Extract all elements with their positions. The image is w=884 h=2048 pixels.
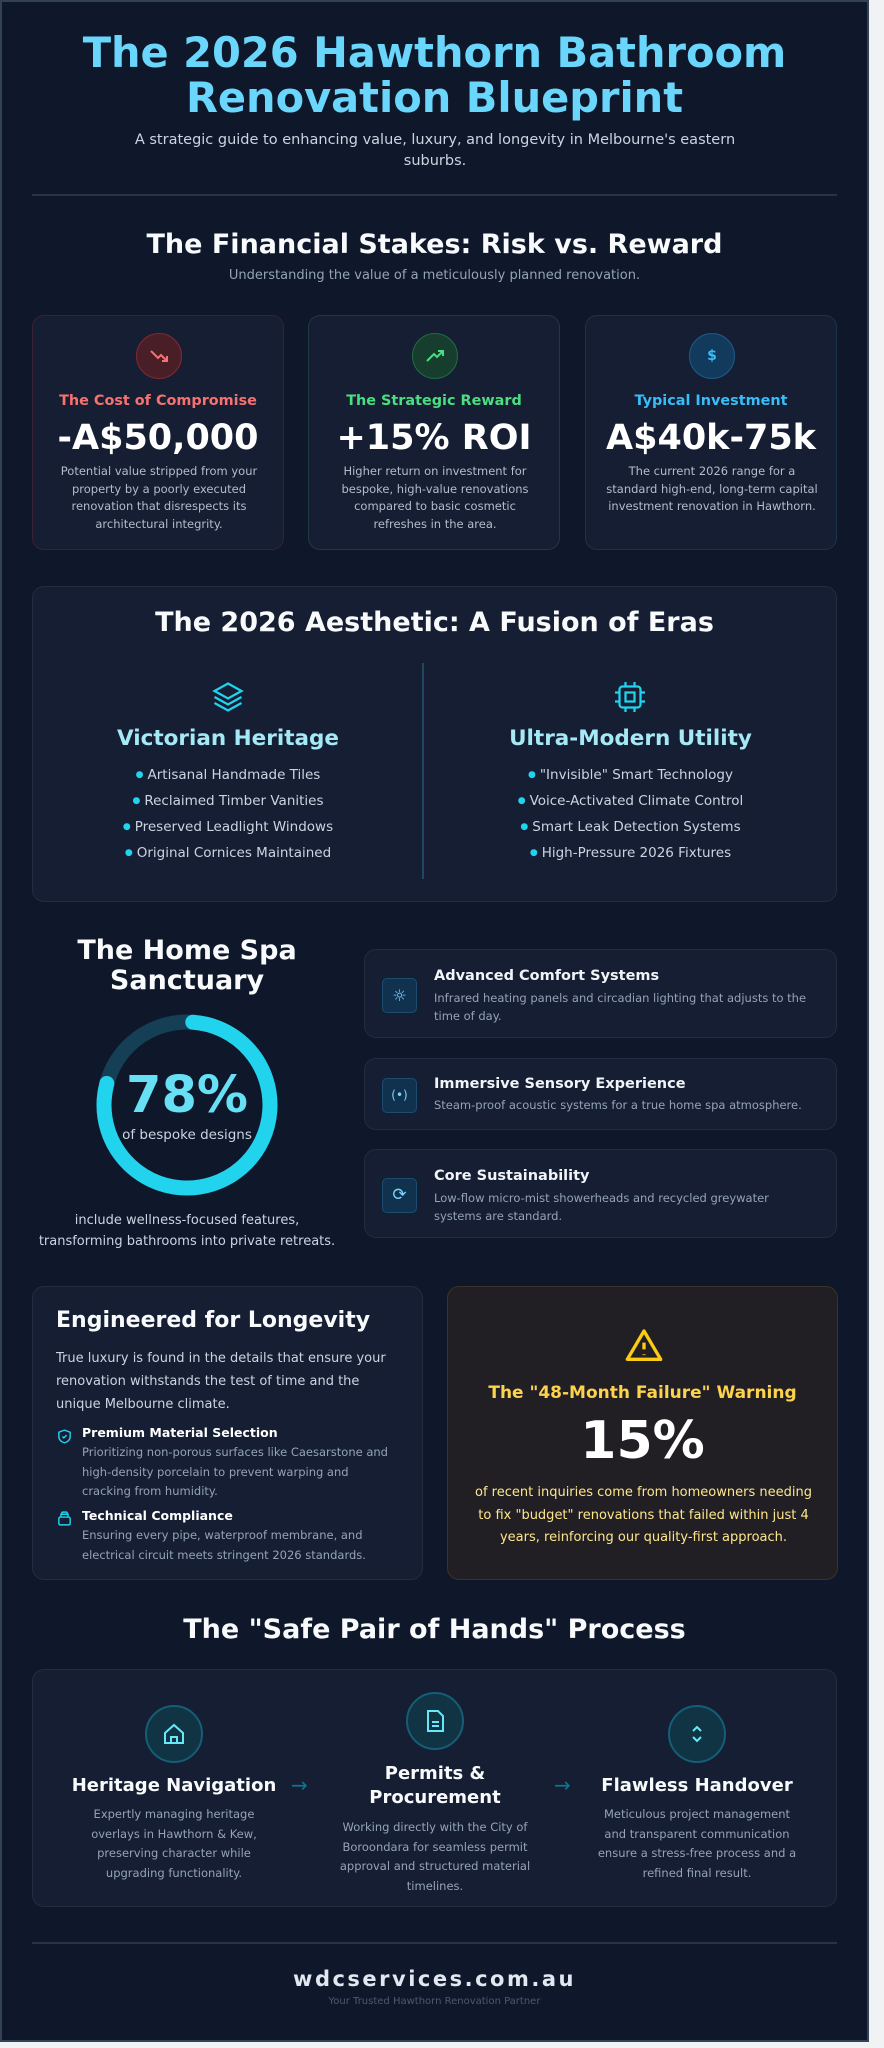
column: victorian bbox=[117, 682, 339, 861]
card: advanced comfort: Advanced Comfort Systems bbox=[434, 968, 659, 984]
card: advanced comfort bbox=[364, 949, 837, 1038]
caption: spa: include wellness-focused features, transforming bathrooms into private retreats. bbox=[39, 1213, 335, 1249]
heading: home spa: Sanctuary bbox=[110, 965, 264, 996]
icon: sun bbox=[382, 978, 417, 1013]
column: victorian: Victorian Heritage bbox=[117, 726, 339, 751]
card: immersive sensory bbox=[364, 1058, 837, 1130]
card: typical investment: A$40k-75k bbox=[606, 418, 816, 458]
panel: longevity: True luxury is found in the details that ensure your renovation withstands the test of time and the unique Melbourne climate. bbox=[56, 1351, 386, 1412]
panel: warning bbox=[447, 1286, 838, 1580]
card: strategic reward bbox=[308, 315, 560, 550]
step: permits: Procurement bbox=[369, 1787, 501, 1808]
icon: dollar: $ bbox=[707, 348, 717, 364]
step: handover: Meticulous project management and transparent communication ensure a stress-free process and a refined final result. bbox=[598, 1807, 796, 1880]
heading: home spa: The Home Spa bbox=[77, 935, 297, 966]
arrow: → bbox=[291, 1773, 308, 1797]
step: permits bbox=[340, 1692, 530, 1892]
column: victorian: ● Reclaimed Timber Vanities bbox=[132, 793, 324, 809]
icon: refresh bbox=[382, 1178, 417, 1213]
step: heritage navigation: Expertly managing heritage overlays in Hawthorn & Kew, preserving character while upgrading functionality. bbox=[91, 1807, 257, 1880]
heading: home spa bbox=[77, 935, 297, 996]
item: technical compliance: Ensuring every pipe, waterproof membrane, and electrical circuit meets stringent 2026 standards. bbox=[82, 1528, 366, 1562]
title bbox=[82, 28, 786, 122]
card: cost of compromise: Potential value stripped from your property by a poorly executed renovation that disrespects its architectural integrity. bbox=[61, 464, 257, 530]
card: immersive sensory: Steam-proof acoustic systems for a true home spa atmosphere. bbox=[434, 1098, 802, 1112]
panel: aesthetic bbox=[32, 586, 837, 902]
icon: warning bbox=[626, 1329, 662, 1361]
card: typical investment: The current 2026 range for a bbox=[629, 464, 795, 478]
panel: warning: 15% bbox=[580, 1411, 705, 1471]
card: strategic reward: +15% ROI bbox=[336, 418, 532, 458]
chart: 78% ring bbox=[96, 1014, 278, 1196]
card: sustainability: Core Sustainability bbox=[434, 1168, 590, 1184]
icon: trend up bbox=[412, 333, 458, 379]
card: typical investment: standard high-end, long-term capital investment renovation in Hawthorn. bbox=[606, 482, 818, 513]
card: cost of compromise bbox=[32, 315, 284, 550]
icon: chip bbox=[615, 682, 645, 712]
step: permits: Permits & bbox=[385, 1763, 485, 1784]
title: The 2026 Hawthorn Bathroom bbox=[83, 28, 786, 77]
card: advanced comfort: Infrared heating panels and circadian lighting that adjusts to the time of day. bbox=[434, 991, 806, 1023]
arrow: → bbox=[554, 1773, 571, 1797]
icon: broadcast bbox=[382, 1078, 417, 1113]
item: technical compliance bbox=[58, 1508, 366, 1562]
item: premium material: Prioritizing non-porous surfaces like Caesarstone and high-density porcelain to prevent warping and cracking from humidity. bbox=[82, 1445, 388, 1498]
column: victorian: ● Original Cornices Maintained bbox=[125, 845, 331, 861]
card: cost of compromise: -A$50,000 bbox=[57, 418, 259, 458]
icon: broadcast: (•) bbox=[391, 1088, 408, 1102]
icon: dollar bbox=[689, 333, 735, 379]
footer: tagline: Your Trusted Hawthorn Renovation Partner bbox=[329, 1996, 540, 2007]
step: permits: Working directly with the City of Boroondara for seamless permit approval and structured material timelines. bbox=[340, 1820, 530, 1892]
column: ultra-modern: ● "Invisible" Smart Technology bbox=[528, 767, 733, 783]
subtitle: A strategic guide to enhancing value, luxury, and longevity in Melbourne's eastern suburbs. bbox=[135, 132, 735, 169]
heading: process: The "Safe Pair of Hands" Process bbox=[183, 1614, 686, 1645]
icon: layers bbox=[212, 682, 244, 712]
column: ultra-modern: ● Voice-Activated Climate Control bbox=[518, 793, 743, 809]
icon: trend down bbox=[136, 333, 182, 379]
card: strategic reward: Higher return on investment for bespoke, high-value renovations compared to basic cosmetic refreshes in the area. bbox=[341, 464, 529, 530]
column: ultra-modern bbox=[509, 682, 752, 861]
card: typical investment: Typical Investment bbox=[634, 393, 787, 409]
column: victorian: ● Preserved Leadlight Windows bbox=[123, 819, 333, 835]
panel: longevity bbox=[32, 1286, 423, 1580]
card: cost of compromise: The Cost of Compromise bbox=[59, 393, 257, 409]
chart: 78% ring: 78% bbox=[126, 1066, 248, 1125]
icon: chevrons bbox=[668, 1705, 726, 1763]
title: Renovation Blueprint bbox=[186, 73, 683, 122]
column: ultra-modern: Ultra-Modern Utility bbox=[509, 726, 752, 751]
step: heritage navigation bbox=[72, 1705, 276, 1880]
card: strategic reward: The Strategic Reward bbox=[346, 393, 522, 409]
card: sustainability: Low-flow micro-mist showerheads and recycled greywater systems are standard. bbox=[434, 1191, 769, 1223]
icon: sun: ☼ bbox=[392, 986, 407, 1005]
step: handover: Flawless Handover bbox=[601, 1775, 793, 1796]
item: premium material: Premium Material Selection bbox=[82, 1425, 278, 1440]
step: heritage navigation: Heritage Navigation bbox=[72, 1775, 276, 1796]
heading: aesthetic: The 2026 Aesthetic: A Fusion of Eras bbox=[155, 607, 714, 638]
item: premium material bbox=[58, 1425, 388, 1498]
column: ultra-modern: ● Smart Leak Detection Systems bbox=[520, 819, 741, 835]
icon: house bbox=[145, 1705, 203, 1763]
step: handover bbox=[598, 1705, 796, 1880]
footer: brand: wdcservices.com.au bbox=[293, 1967, 576, 1991]
card: sustainability bbox=[364, 1149, 837, 1238]
column: ultra-modern: ● High-Pressure 2026 Fixtures bbox=[530, 845, 731, 861]
panel: warning: of recent inquiries come from homeowners needing to fix "budget" renovations that failed within just 4 years, reinforcing our quality-first approach. bbox=[475, 1485, 812, 1545]
panel: warning: The "48-Month Failure" Warning bbox=[488, 1383, 797, 1403]
icon: document bbox=[406, 1692, 464, 1750]
icon: refresh: ⟳ bbox=[392, 1185, 407, 1205]
item: technical compliance: Technical Compliance bbox=[82, 1508, 233, 1523]
heading: financial stakes: The Financial Stakes: Risk vs. Reward bbox=[147, 229, 722, 260]
chart: 78% ring: of bespoke designs bbox=[122, 1127, 252, 1143]
card: typical investment bbox=[585, 315, 837, 550]
panel: process bbox=[32, 1669, 837, 1907]
card: immersive sensory: Immersive Sensory Experience bbox=[434, 1076, 686, 1092]
heading: longevity: Engineered for Longevity bbox=[56, 1308, 370, 1333]
subheading: Understanding the value of a meticulously planned renovation. bbox=[229, 268, 640, 283]
column: victorian: ● Artisanal Handmade Tiles bbox=[136, 767, 320, 783]
